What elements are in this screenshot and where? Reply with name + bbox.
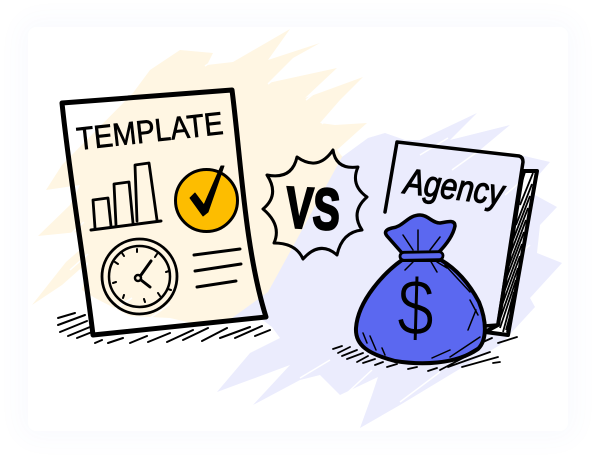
brush stroke: lavender [217,113,562,428]
money bag [333,215,517,371]
bag body [356,260,485,363]
bag shadow hatching [333,337,517,371]
template sheet [58,90,270,343]
dollar sign: $ [396,262,435,353]
icon: check circle [176,166,238,232]
heading: TEMPLATE: TEMPLATE [75,105,225,157]
agency document [385,142,537,335]
heading: Agency: Agency [400,160,508,213]
front sheet [385,142,523,326]
back sheet hatching [499,172,533,332]
brush stroke: yellow [32,29,385,325]
back sheet [485,171,537,335]
bag folds [363,230,482,358]
bag top [386,215,455,253]
sheet shadow hatching [58,313,270,343]
VS badge [263,150,367,259]
sheet outline [62,90,266,335]
VS badge: VS [284,175,342,243]
bag tie [400,252,443,260]
text lines [194,249,241,287]
icon: bar chart [91,163,161,230]
panel: card background [28,27,568,431]
icon: clock [102,239,177,314]
